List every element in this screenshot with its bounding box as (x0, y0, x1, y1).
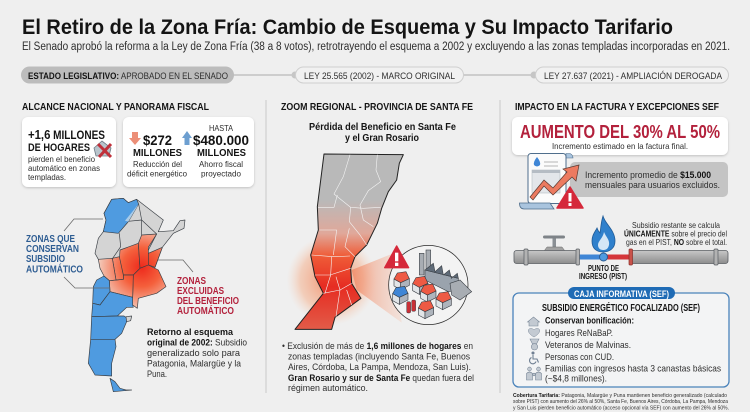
text: exclusion bullet: régimen automático. (288, 383, 368, 394)
icon: bill with rising arrow (520, 154, 583, 209)
text: return to 2002: Retorno al esquema (147, 327, 234, 337)
text: exclusion bullet (282, 341, 474, 394)
icon: home (528, 317, 540, 326)
card: fiscal: MILLONES (133, 147, 182, 159)
law 2002 pill: LEY 25.565 (2002) - MARCO ORIGINAL (304, 71, 455, 82)
panel: SEF info box: Hogares ReNaBaP. (545, 328, 613, 339)
text: exclusion bullet: • Exclusión de más de 1,6 millones de hogares en (282, 341, 473, 352)
footnote (513, 393, 729, 412)
title: El Retiro de la Zona Fría: Cambio de Esquema y Su Impacto Tarifario (22, 16, 673, 39)
label: excluded zones (177, 276, 239, 317)
icon: accessibility (530, 352, 538, 364)
central provinces (119, 243, 140, 275)
law 2021 pill (536, 67, 728, 83)
card: hogares: pierden el beneficio (28, 155, 96, 164)
inset circle (389, 245, 472, 325)
badge: CAJA INFORMATIVA (SEF) (574, 289, 669, 299)
callout: blue zones line (64, 219, 110, 288)
label: zones keeping subsidy: ZONAS QUE (26, 234, 75, 245)
label: zones keeping subsidy (26, 234, 83, 276)
chimneys (419, 253, 424, 275)
label: PIST: PUNTO DE (588, 264, 619, 273)
footnote: sobre PIST) con aumento del 26% al 50%, Santa Fe, Buenos Aires, Córdoba, La Pampa, Mendoza (513, 399, 728, 405)
factory (425, 270, 458, 292)
label: PIST (579, 264, 627, 281)
icon: warning (557, 187, 583, 208)
icon: warning (385, 246, 409, 268)
panel: SEF info box (513, 287, 729, 387)
label: zones keeping subsidy: SUBSIDIO (26, 254, 65, 265)
heading: Santa Fe map: y el Gran Rosario (345, 132, 419, 144)
panel: SEF info box: Personas con CUD. (545, 352, 614, 363)
callout: promedio: mensuales para usuarios excluidos. (585, 180, 720, 190)
label: excluded zones: ZONAS (177, 276, 206, 287)
heading: zoom regional: ZOOM REGIONAL - PROVINCIA DE SANTA FE (281, 102, 473, 113)
map: Argentina (88, 198, 185, 392)
label: zones keeping subsidy: AUTOMÁTICO (26, 262, 83, 276)
card: fiscal: HASTA (209, 124, 234, 133)
panel: SEF info box: (~$4,8 millones). (545, 374, 607, 384)
label: PIST: INGRESO (PIST) (579, 272, 627, 281)
icon: arrow up (182, 131, 192, 145)
card: fiscal: Ahorro fiscal (199, 160, 243, 169)
callout: promedio: Incremento promedio de $15.000 (585, 170, 711, 180)
card: fiscal: proyectado (201, 170, 242, 178)
panel: SEF info box: Familias con ingresos hasta 3 canastas básicas (545, 364, 721, 374)
label: zones keeping subsidy: CONSERVAN (26, 244, 79, 255)
label: excluded zones: DEL BENEFICIO (177, 296, 239, 307)
card: fiscal: MILLONES (197, 147, 246, 159)
text: return to 2002: generalizado solo para (147, 348, 241, 358)
heading: Santa Fe map (309, 121, 456, 144)
text: return to 2002 (147, 327, 247, 379)
card: hogares (22, 117, 116, 187)
silhouette north (95, 198, 185, 281)
callout: red zones line (158, 260, 193, 272)
card: fiscal: $272 (143, 132, 172, 148)
card: increase: Incremento estimado en la factura final. (552, 142, 688, 151)
heading: impacto: IMPACTO EN LA FACTURA Y EXCEPCIONES SEF (515, 102, 719, 113)
icon: family (526, 367, 542, 380)
text: exclusion bullet: Gran Rosario y sur de Santa Fe quedan fuera del (288, 373, 474, 384)
card: fiscal: déficit energético (127, 170, 188, 178)
callout: promedio (570, 162, 728, 197)
heading: alcance nacional: ALCANCE NACIONAL Y PANORAMA FISCAL (22, 102, 209, 113)
heading: Santa Fe map: Pérdida del Beneficio en Santa Fe (309, 121, 456, 133)
map: Santa Fe with inset (287, 154, 472, 329)
text: subsidy note (624, 220, 727, 247)
status pill: ESTADO LEGISLATIVO: APROBADO EN EL SENADO (28, 71, 228, 82)
icon: heart (528, 328, 540, 337)
panel: SEF info box: Conservan bonificación: (545, 316, 634, 326)
card: hogares: automático en zonas (28, 164, 100, 173)
icon: arrow down (129, 132, 141, 145)
label: excluded zones: EXCLUIDAS (177, 286, 224, 297)
timeline bar (21, 66, 728, 84)
text: return to 2002: Puna. (147, 369, 167, 379)
icon: medal (530, 339, 539, 350)
text: exclusion bullet: Aires, Córdoba, La Pampa, Mendoza, San Luis). (288, 362, 471, 373)
footnote: Cobertura Tarifaria: Patagonia, Malargüe y Puna mantienen beneficio generalizado (calculado (513, 393, 727, 399)
diagram: gas pipe (514, 216, 728, 265)
text: subsidy note: gas en el PIST, NO sobre el total. (626, 237, 727, 247)
text: subsidy note: Subsidio restante se calcula (632, 220, 720, 230)
text: exclusion bullet: zonas templadas (incluyendo Santa Fe, Buenos (288, 352, 470, 362)
card: fiscal: $480.000 (193, 132, 249, 148)
text: return to 2002: original de 2002: Subsidio (147, 338, 247, 348)
card: hogares: +1,6 MILLONES (28, 127, 105, 142)
card: increase (512, 117, 728, 155)
card: hogares: templadas. (28, 173, 66, 182)
card: fiscal (123, 117, 254, 187)
text: subsidy note: ÚNICAMENTE sobre el precio del (624, 228, 727, 238)
southern provinces (93, 276, 110, 305)
law 2021 pill: LEY 27.637 (2021) - AMPLIACIÓN DEROGADA (544, 71, 723, 82)
icon: flame (592, 216, 615, 252)
label: excluded zones: AUTOMÁTICO (177, 304, 234, 317)
text: return to 2002: Patagonia, Malargüe y la (147, 358, 242, 368)
card: hogares: DE HOGARES (28, 142, 90, 154)
law 2002 pill (296, 67, 464, 83)
panel: SEF info box: Veteranos de Malvinas. (545, 340, 631, 351)
card: fiscal: Reducción del (133, 160, 182, 169)
footnote: y San Luis pierden beneficio automático (acceso opcional vía SEF) con aumento del 26% al 50%. (513, 406, 729, 412)
status pill (21, 66, 234, 84)
icon: house crossed (94, 141, 111, 157)
